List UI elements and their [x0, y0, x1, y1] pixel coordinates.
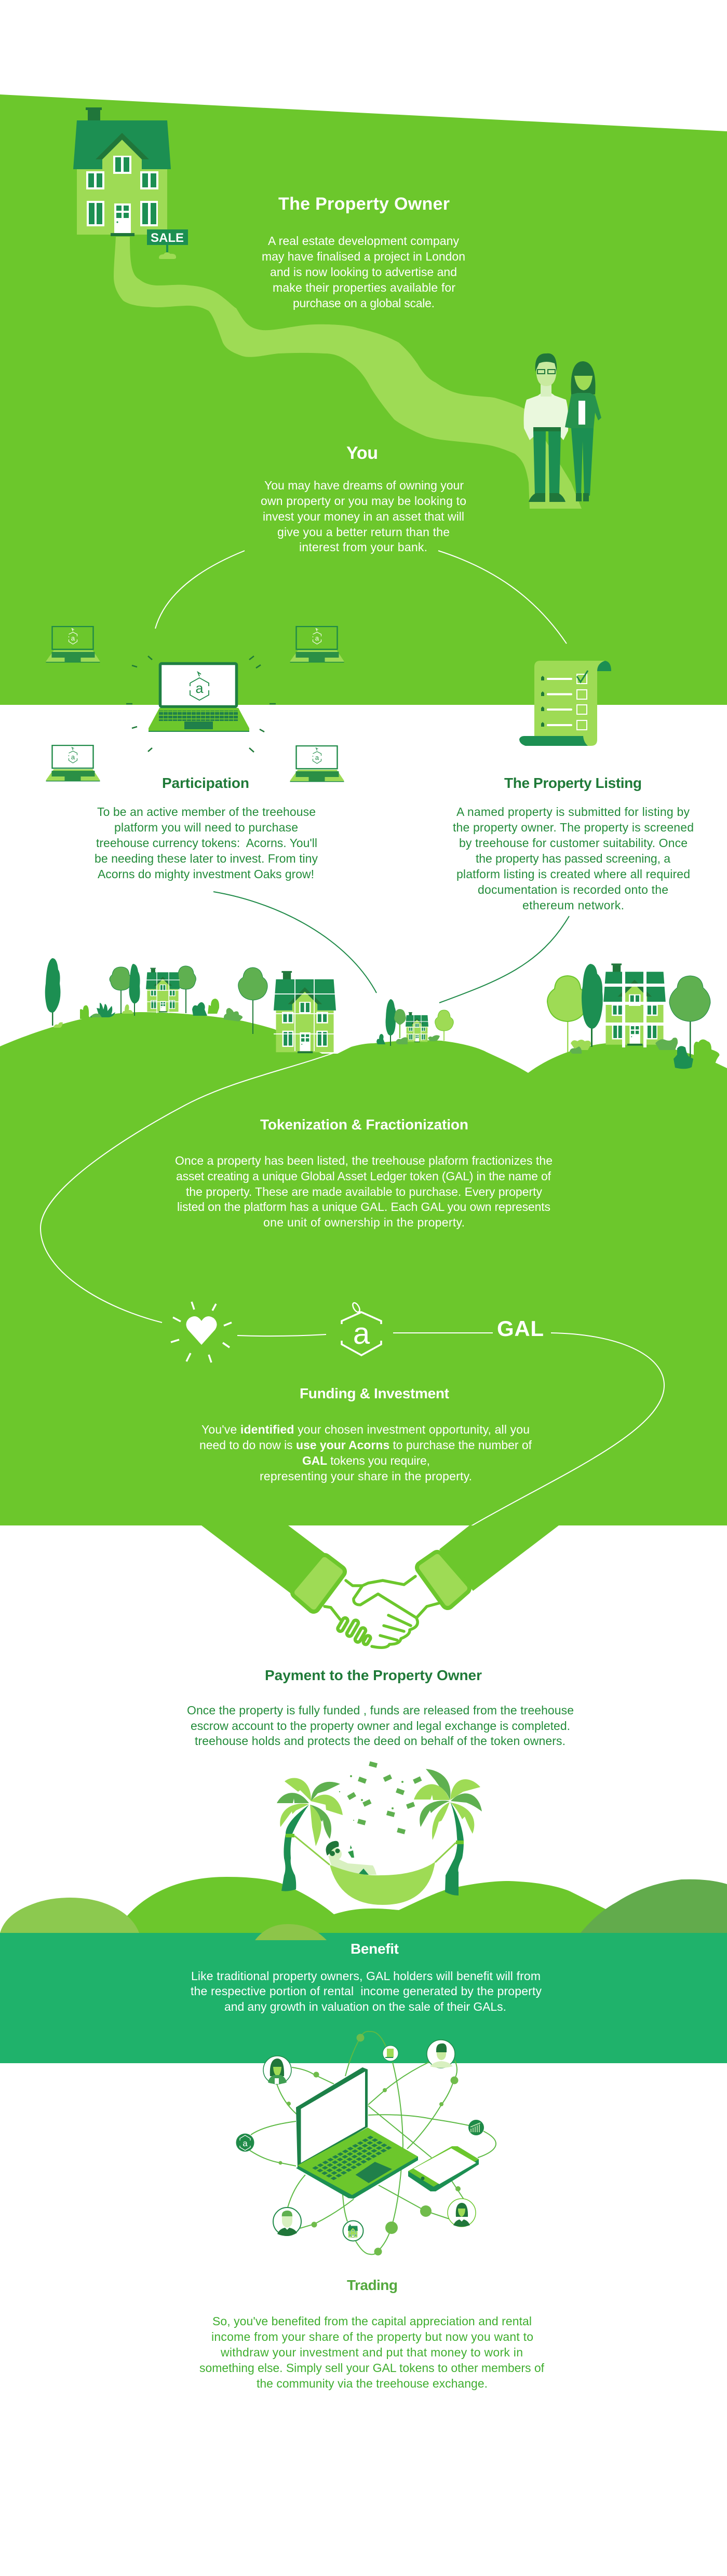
icon: house for sale: [73, 107, 188, 259]
text block: benefit: and any growth in valuation on the sale of their GALs.: [224, 2000, 506, 2013]
text block: you: You may have dreams of owning your: [264, 479, 464, 492]
laptop: top right: [290, 626, 344, 662]
icon: acorn logo: a: [353, 1317, 370, 1351]
laptop: isometric: [296, 2067, 418, 2199]
icon: logo in circle: [236, 2133, 254, 2152]
heading: Participation: Participation: [162, 775, 249, 791]
text block: payment: [187, 1703, 574, 1748]
text block: property owner: purchase on a global scale.: [293, 296, 435, 310]
text block: you: interest from your bank.: [299, 540, 427, 554]
village illustration: [45, 958, 719, 1069]
text block: participation: treehouse currency tokens: Acorns. You'll: [96, 836, 317, 850]
avatar: woman bottom right: [448, 2199, 476, 2227]
hammock ropes: [294, 1836, 456, 1865]
right cuff: [422, 1557, 464, 1603]
orbit nodes: [278, 2034, 461, 2256]
text block: payment: Once the property is fully funded , funds are released from the treehouse: [187, 1703, 574, 1717]
text block: benefit: Like traditional property owners, GAL holders will benefit will from: [191, 1969, 541, 1983]
text block: participation: platform you will need to purchase: [114, 821, 298, 834]
text block: tokenization: listed on the platform has a unique GAL. Each GAL you own represents: [177, 1200, 550, 1214]
text block: trading: income from your share of the property but now you want to: [211, 2330, 533, 2343]
text block: you: [261, 479, 466, 554]
text block: you: give you a better return than the: [277, 525, 450, 539]
text block: property owner: [262, 234, 465, 310]
trees: left hill: [45, 958, 267, 1034]
text block: benefit: [191, 1969, 542, 2013]
icon: acorn logo: [342, 1302, 381, 1355]
laptop: top left: a: [71, 634, 75, 642]
man figure: [524, 353, 568, 502]
laptop: bottom right: a: [315, 754, 319, 761]
text block: property listing: [453, 805, 694, 912]
icon: house in circle: [343, 2220, 363, 2241]
text block: tokenization: one unit of ownership in the property.: [263, 1216, 465, 1229]
avatar: man bottom left: [273, 2207, 301, 2236]
text block: property listing: documentation is recorded onto the: [478, 883, 668, 896]
icon: heart with rays: [171, 1302, 232, 1362]
green hills section: [0, 1012, 727, 1525]
heading: Benefit: Benefit: [351, 1941, 399, 1957]
icon: chart in circle: [468, 2120, 484, 2135]
text block: funding: GAL tokens you require,: [302, 1454, 430, 1467]
small house: left hill: [146, 968, 180, 1013]
falling money: [339, 1761, 422, 1834]
laptop: bottom right: [290, 746, 344, 782]
icon: handshake: [201, 1525, 559, 1647]
woman figure: [565, 361, 601, 501]
benefit band: [0, 1933, 727, 2063]
avatar: woman top left: [263, 2056, 291, 2084]
arrow: property listing to tokenization: [439, 916, 569, 1003]
winding connector line: [41, 1050, 343, 1323]
text block: property listing: by treehouse for customer suitability. Once: [459, 836, 688, 850]
icon: couple: [524, 353, 601, 502]
text block: property listing: the property owner. The property is screened: [453, 821, 694, 834]
text block: property owner: and is now looking to advertise and: [270, 265, 457, 279]
text block: trading: So, you've benefited from the capital appreciation and rental: [212, 2314, 532, 2328]
arrow: you to property listing: [438, 551, 567, 644]
small hill over band: [255, 1924, 327, 1940]
avatar: man top right: [427, 2040, 455, 2068]
palm tree: left: [277, 1778, 343, 1891]
laptop: centre: a: [195, 680, 204, 696]
heading: Trading: Trading: [347, 2277, 398, 2293]
text block: you: own property or you may be looking to: [261, 494, 466, 508]
hands: [325, 1576, 440, 1647]
bushes: left hill: [53, 999, 243, 1028]
heading: You: You: [346, 443, 378, 463]
text block: property listing: ethereum network.: [522, 898, 624, 912]
text block: trading: something else. Simply sell your GAL tokens to other members of: [199, 2361, 545, 2375]
right arm: [439, 1525, 559, 1591]
illustration: trading network: [236, 2032, 496, 2256]
palm tree: right: [414, 1769, 482, 1896]
arrow: you to participation: [155, 551, 245, 629]
sale sign: [147, 229, 188, 259]
trees and house: middle hill: [376, 999, 453, 1046]
text block: participation: be needing these later to invest. From tiny: [95, 852, 318, 865]
laptop: top left: [46, 626, 100, 662]
text block: tokenization: the property. These are made available to purchase. Every property: [186, 1185, 542, 1198]
benefit hills: [0, 1877, 727, 1933]
text block: property listing: the property has passed screening, a: [476, 852, 670, 865]
text block: payment: treehouse holds and protects the deed on behalf of the token owners.: [195, 1734, 566, 1748]
arrow: participation to tokenization: [213, 892, 376, 993]
label: GAL: GAL: [497, 1316, 544, 1341]
icon: logo in circle: a: [243, 2138, 248, 2148]
text block: tokenization: Once a property has been listed, the treehouse plaform fractionizes the: [175, 1154, 553, 1167]
rays around laptop: [126, 656, 276, 752]
laptop: top right: a: [315, 634, 319, 642]
text block: property owner: A real estate development company: [268, 234, 459, 248]
text block: funding: [199, 1423, 532, 1483]
text block: tokenization: [175, 1154, 553, 1229]
heading: Funding and Investment: Funding & Investment: [300, 1385, 449, 1401]
orbit lines: [250, 2032, 496, 2254]
connector: heart to logo: [237, 1334, 326, 1336]
hammock: [330, 1862, 435, 1905]
laptop: bottom left: a: [71, 753, 75, 761]
winding path: [114, 237, 582, 509]
text block: tokenization: asset creating a unique Global Asset Ledger token (GAL) in the name of: [176, 1169, 551, 1183]
heading: Payment to the Property Owner: Payment to the Property Owner: [265, 1667, 482, 1683]
left cuff: [298, 1560, 340, 1606]
large house: [274, 971, 336, 1053]
connector: GAL to handshake: [469, 1333, 664, 1527]
text block: property owner: may have finalised a project in London: [262, 250, 465, 263]
connector: logo to GAL: [393, 1332, 493, 1333]
text block: participation: Acorns do mighty investment Oaks grow!: [98, 867, 314, 881]
icon: small scroll in circle: [383, 2046, 398, 2061]
fingers: [337, 1617, 371, 1645]
heading: The Property Listing: The Property Listing: [504, 775, 642, 791]
text block: funding: need to do now is use your Acorns to purchase the number of: [199, 1438, 532, 1452]
icon: hammock under palm trees: [277, 1761, 482, 1905]
text block: property listing: platform listing is created where all required: [456, 867, 690, 881]
text block: trading: [199, 2314, 545, 2390]
text block: participation: [95, 805, 318, 881]
top green section: [0, 94, 727, 705]
text block: funding: You've identified your chosen investment opportunity, all you: [201, 1423, 530, 1436]
text block: funding: representing your share in the property.: [260, 1469, 472, 1483]
icon: property listing scroll: [519, 661, 611, 746]
icon: connected laptops: [46, 626, 344, 782]
sale sign: SALE: [151, 231, 184, 245]
text block: you: invest your money in an asset that will: [263, 510, 464, 523]
trees and house: right hill: [547, 962, 719, 1069]
text block: participation: To be an active member of the treehouse: [97, 805, 316, 819]
heading: Tokenization and Fractionization: Tokenization & Fractionization: [260, 1116, 468, 1133]
text block: payment: escrow account to the property owner and legal exchange is completed.: [191, 1719, 570, 1733]
text block: property listing: A named property is submitted for listing by: [456, 805, 690, 819]
checklist: [541, 671, 588, 730]
laptop: centre: [149, 663, 249, 732]
laptop: bottom left: [46, 745, 100, 782]
heading: The Property Owner: The Property Owner: [278, 194, 450, 214]
left arm: [201, 1525, 325, 1593]
text block: trading: withdraw your investment and put that money to work in: [220, 2346, 523, 2359]
text block: benefit: the respective portion of rental income generated by the property: [191, 1984, 542, 1998]
phone: [408, 2146, 479, 2191]
text block: property owner: make their properties available for: [273, 281, 455, 294]
man relaxing: [326, 1841, 376, 1875]
text block: trading: the community via the treehouse exchange.: [257, 2377, 488, 2390]
